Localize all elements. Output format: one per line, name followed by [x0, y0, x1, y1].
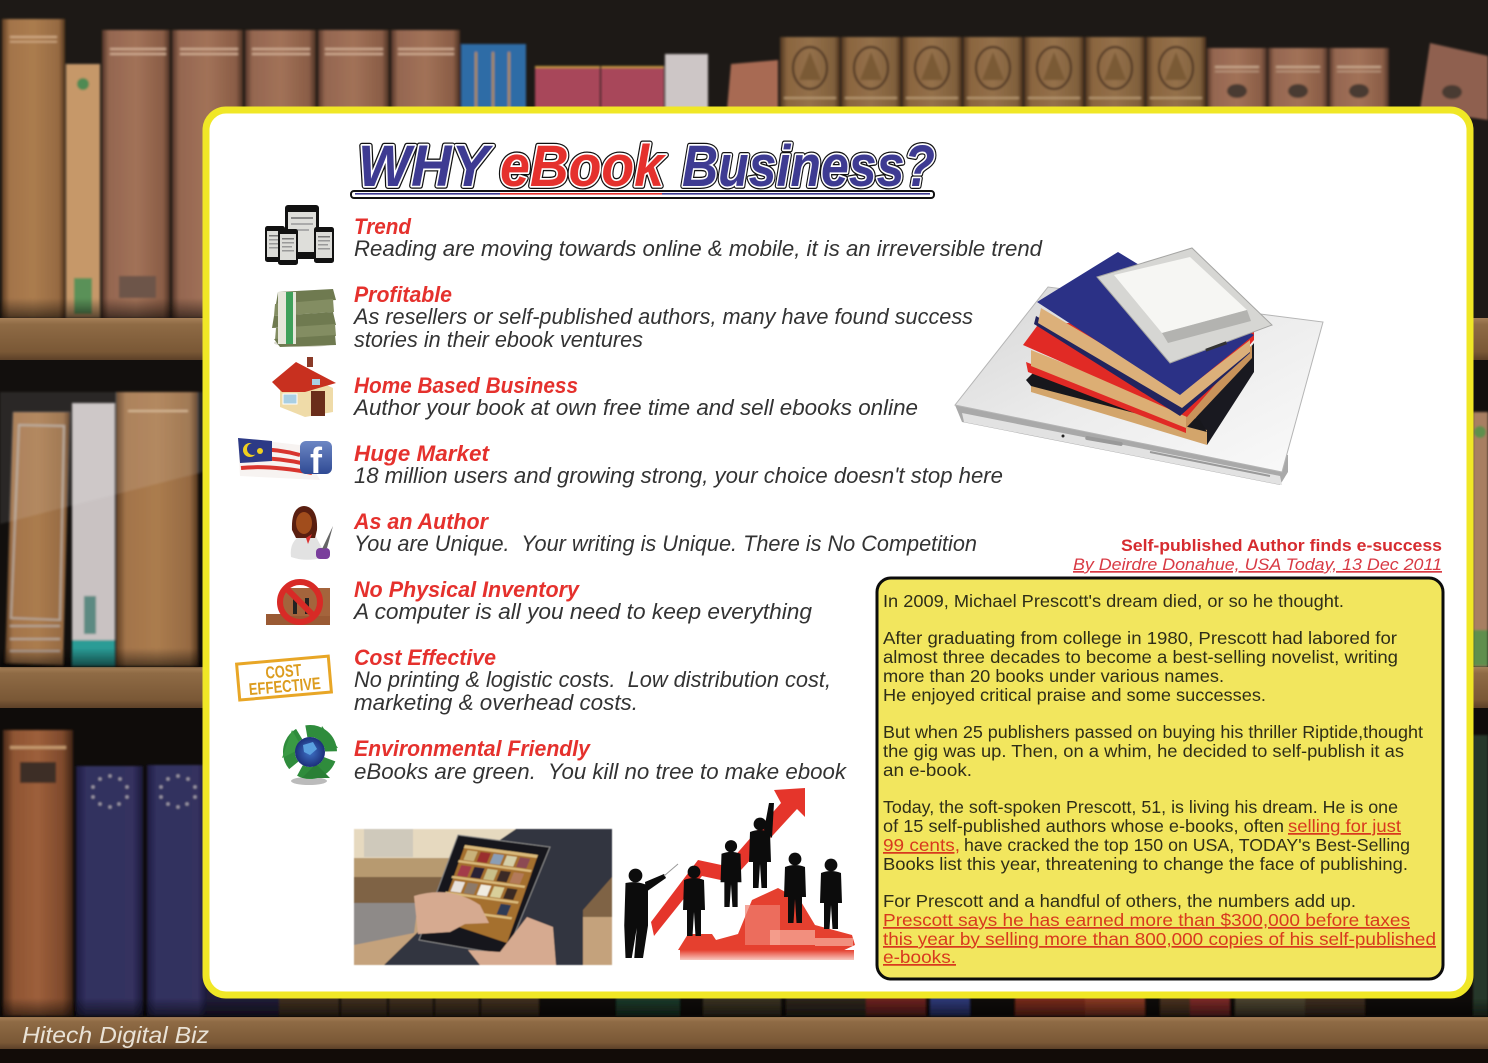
top row books — [0, 19, 1488, 318]
icon: cost effective stamp — [237, 656, 331, 700]
item: Huge Market: Huge Market — [354, 441, 491, 466]
title: eBook — [500, 134, 667, 199]
icon: recycling globe — [282, 726, 338, 785]
item: No Physical Inventory — [352, 577, 813, 624]
item: Environmental Friendly: eBooks are green. You kill no tree to make ebook — [354, 759, 847, 784]
article callout box: For Prescott and a handful of others, the numbers add up. — [883, 891, 1356, 911]
title: eBook — [500, 134, 667, 199]
shelf boards — [0, 318, 1488, 1063]
item: Profitable: stories in their ebook ventures — [354, 327, 643, 352]
illustration: business team with rising arrow — [624, 788, 855, 960]
item: Profitable: Profitable — [354, 282, 452, 307]
item: Cost Effective — [354, 645, 831, 715]
item: Home Based Business: Home Based Business — [354, 373, 578, 398]
item: As an Author: You are Unique. Your writing is Unique. There is No Competition — [354, 531, 977, 556]
article callout box — [877, 578, 1443, 979]
title: Business? — [682, 134, 935, 199]
title — [351, 134, 935, 199]
title: WHY — [358, 134, 494, 199]
article callout box: more than 20 books under various names. — [883, 666, 1224, 686]
article callout box: this year by selling more than 800,000 copies of his self-published — [883, 929, 1436, 949]
icon: no inventory sign over bricks — [266, 582, 330, 625]
photo: hands using a tablet — [354, 829, 612, 965]
icon: Malaysian flag and Facebook — [238, 438, 332, 481]
article callout box: After graduating from college in 1980, Prescott had labored for — [883, 628, 1397, 648]
icon: phones and tablets — [265, 205, 334, 265]
icon: Malaysian flag and Facebook: f — [310, 440, 323, 481]
growth arrow — [651, 788, 805, 936]
icon: house — [272, 357, 336, 417]
item: As an Author — [353, 509, 977, 556]
article callout box: the gig was up. Then, on a whim, he decided to self-publish it as — [883, 741, 1404, 761]
article source — [1073, 536, 1442, 574]
item: Cost Effective: marketing & overhead costs. — [354, 690, 638, 715]
silhouettes of people — [624, 803, 842, 958]
article callout box: Books list this year, threatening to change the face of publishing. — [883, 854, 1408, 874]
panel: main white card with yellow border — [206, 110, 1470, 995]
icon: stack of money — [272, 289, 336, 347]
item: Cost Effective: No printing & logistic costs. Low distribution cost, — [354, 667, 831, 692]
article callout box: In 2009, Michael Prescott's dream died, or so he thought. — [883, 591, 1344, 611]
item: No Physical Inventory: No Physical Inventory — [354, 577, 581, 602]
black book — [1026, 343, 1254, 445]
title: WHY — [358, 134, 494, 199]
item: Cost Effective: Cost Effective — [354, 645, 496, 670]
article callout box: He enjoyed critical praise and some successes. — [883, 685, 1266, 705]
article callout box: Today, the soft-spoken Prescott, 51, is living his dream. He is one — [883, 797, 1398, 817]
item: Trend: Trend — [354, 214, 412, 239]
red building base — [678, 888, 855, 960]
item: As an Author: As an Author — [353, 509, 489, 534]
title: Business? — [682, 134, 935, 199]
item: Home Based Business: Author your book at own free time and sell ebooks online — [352, 395, 918, 420]
article callout box: of 15 self-published authors whose e-books, often — [883, 816, 1284, 836]
item: No Physical Inventory: A computer is all you need to keep everything — [352, 599, 813, 624]
red book — [1023, 322, 1254, 433]
footer brand: Hitech Digital Biz — [22, 1022, 210, 1048]
item: Home Based Business — [352, 373, 918, 420]
e-reader — [1097, 248, 1272, 363]
article source: Self-published Author finds e-success — [1121, 536, 1442, 555]
bottom row books — [0, 730, 1488, 1016]
item: Environmental Friendly — [354, 736, 847, 784]
article callout box: Prescott says he has earned more than $300,000 before taxes — [883, 910, 1410, 930]
article callout box: almost three decades to become a best-selling novelist, writing — [883, 647, 1398, 667]
article source: By Deirdre Donahue, USA Today, 13 Dec 2011 — [1073, 555, 1442, 574]
item: Huge Market: 18 million users and growing strong, your choice doesn't stop here — [354, 463, 1003, 488]
article callout box: But when 25 publishers passed on buying his thriller Riptide,thought — [883, 722, 1423, 742]
item: Huge Market — [354, 441, 1003, 488]
article callout box: have cracked the top 150 on USA, TODAY's Best-Selling — [964, 835, 1410, 855]
title: eBook — [500, 134, 667, 199]
icon: cost effective stamp: COST — [265, 661, 303, 683]
item: Environmental Friendly: Environmental Friendly — [354, 736, 592, 761]
article callout box: e-books. — [883, 947, 956, 967]
blue book — [1034, 252, 1254, 416]
item: Profitable: As resellers or self-published authors, many have found success — [352, 304, 973, 329]
item: Trend: Reading are moving towards online & mobile, it is an irreversible trend — [354, 236, 1043, 261]
middle row books — [0, 392, 1488, 667]
article callout box: selling for just — [1288, 816, 1401, 836]
title: WHY — [358, 134, 494, 199]
article callout box: an e-book. — [883, 760, 972, 780]
item: Profitable — [352, 282, 973, 352]
image: laptop, books and e-reader — [955, 248, 1323, 485]
icon: woman author with quill — [291, 506, 333, 560]
article callout box: 99 cents, — [883, 835, 960, 855]
title: Business? — [682, 134, 935, 199]
icon: cost effective stamp: EFFECTIVE — [248, 674, 321, 699]
item: Trend — [354, 214, 1043, 261]
